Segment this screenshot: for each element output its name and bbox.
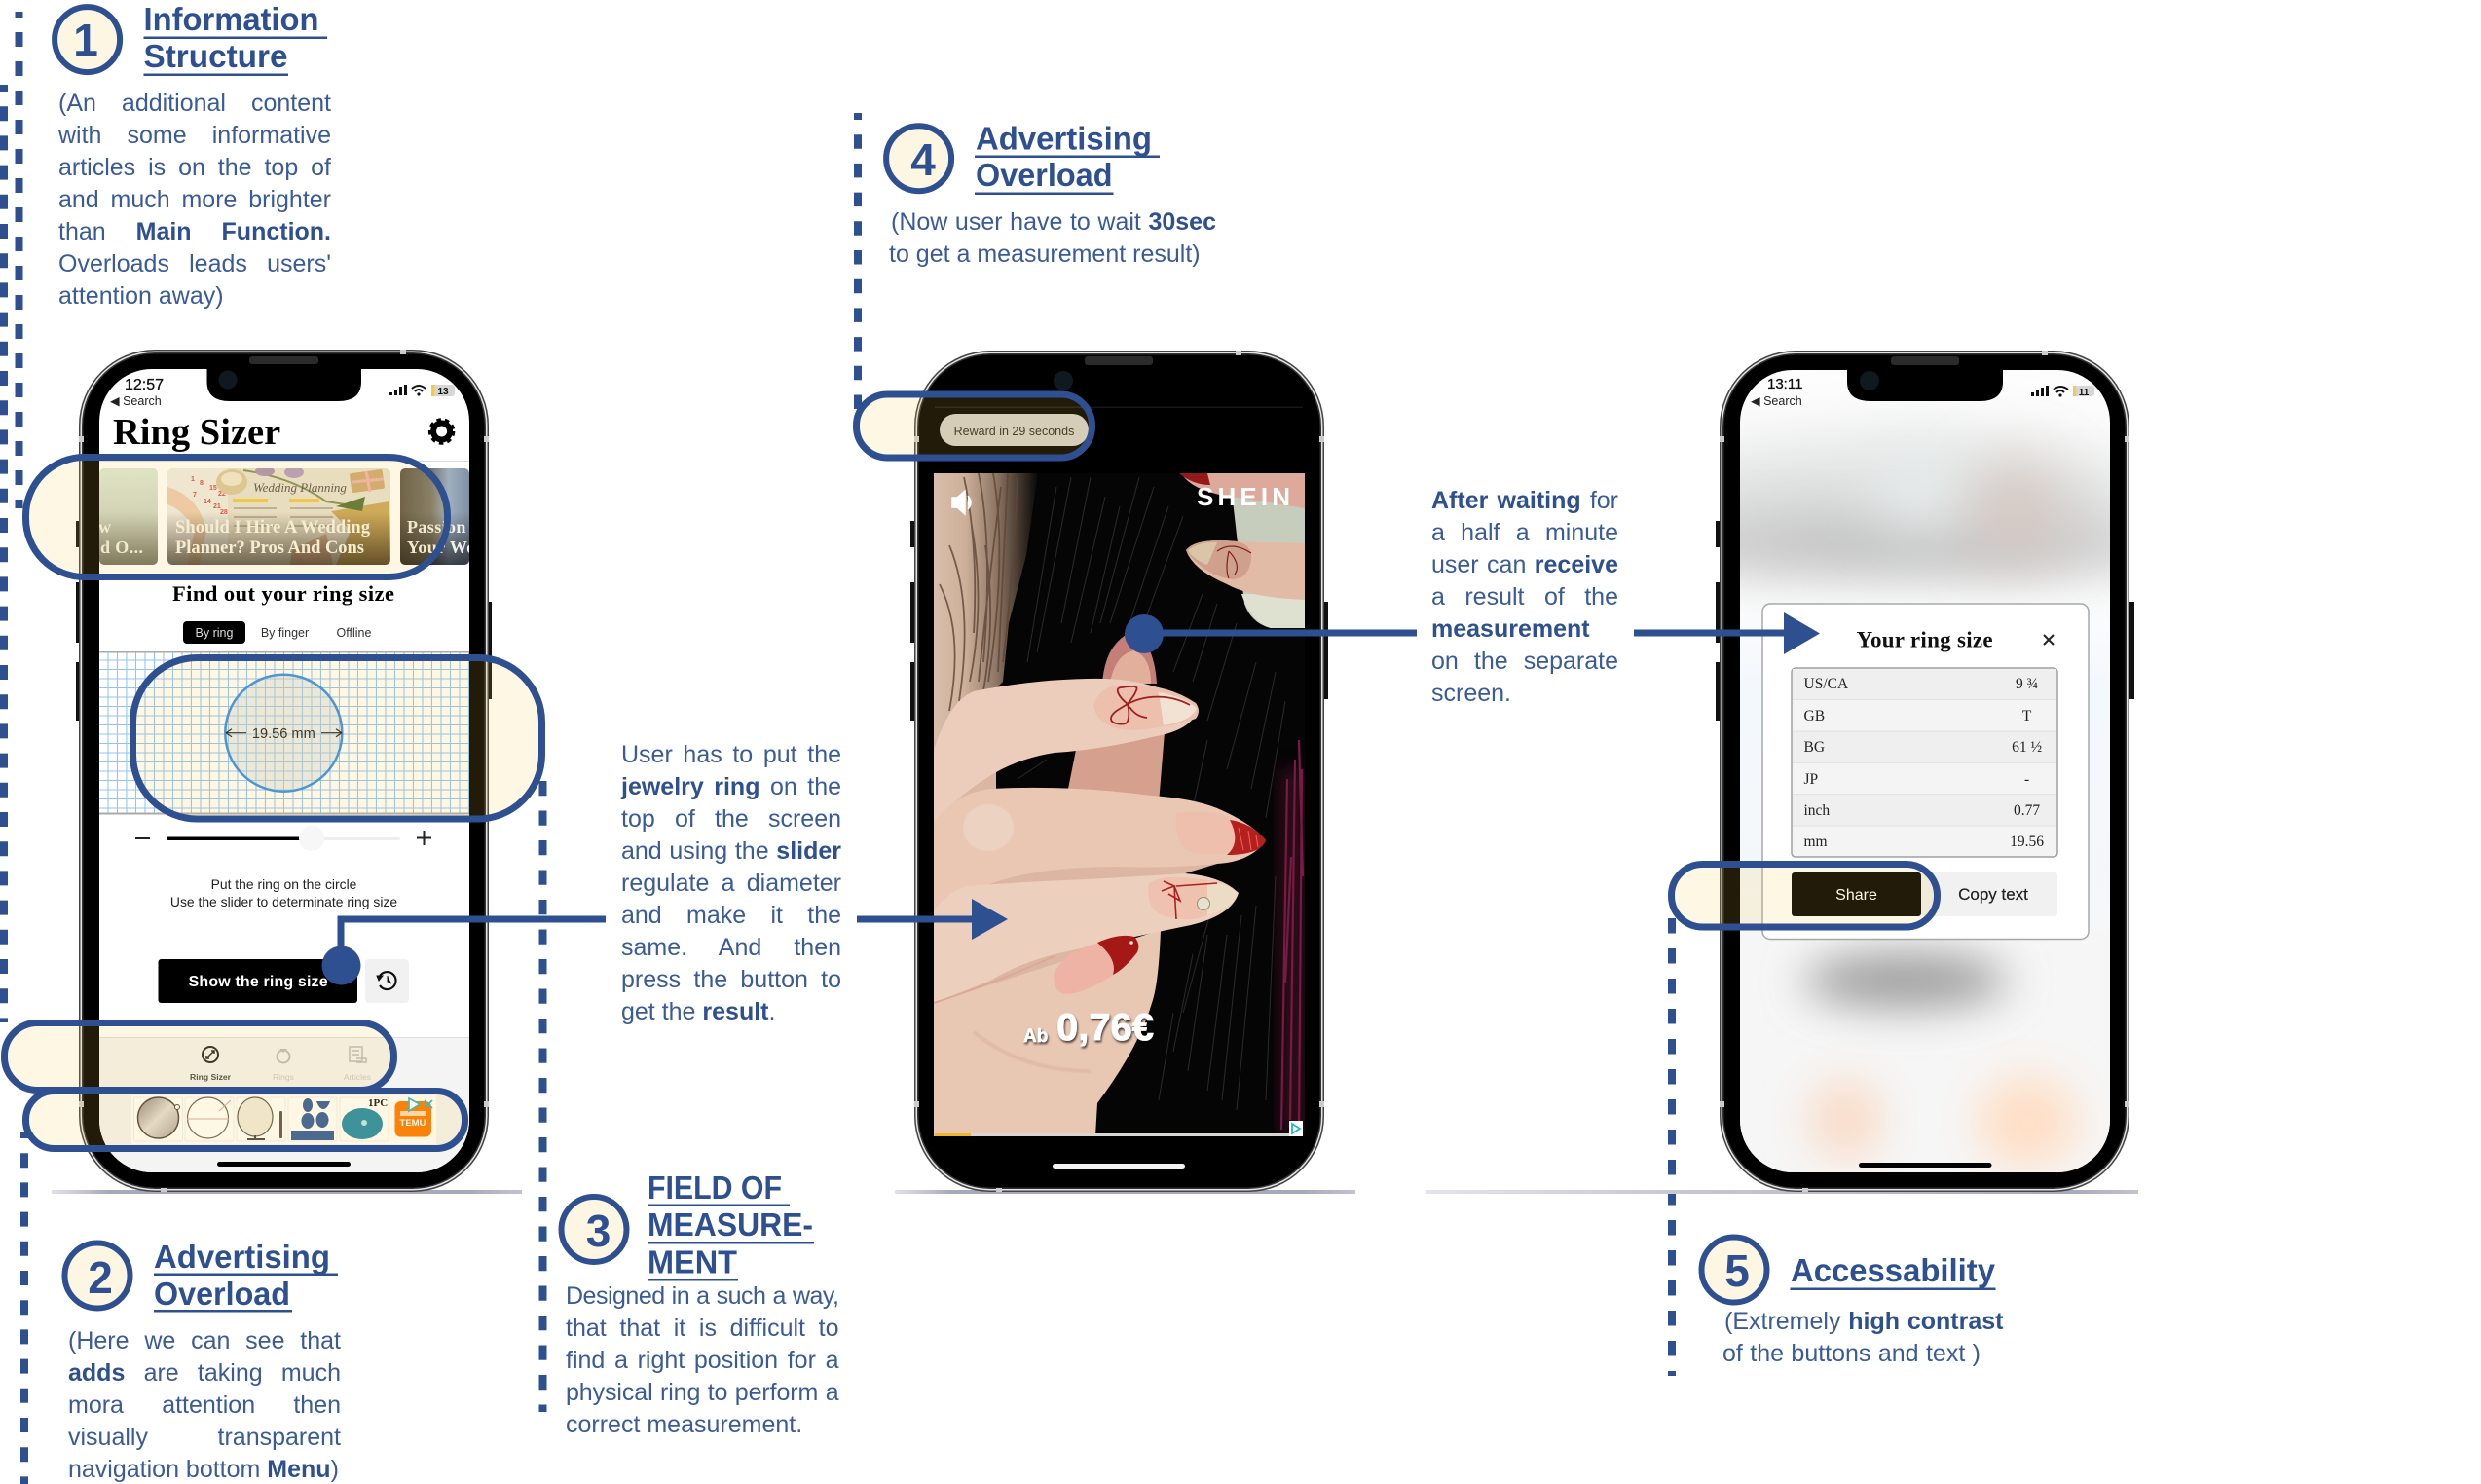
- heading 3: [648, 1169, 814, 1281]
- highlight: measurement field: [132, 658, 541, 819]
- heading 5: Accessability: [1791, 1252, 1996, 1288]
- text block 2: advertising overload: [68, 1327, 341, 1483]
- measurement grid field: [99, 651, 469, 814]
- heading 3: MEASURE-: [648, 1206, 813, 1243]
- video progress bar: [935, 1133, 1291, 1136]
- size table: 9 ¾: [2016, 676, 2038, 692]
- text block: slider instructions: get the result.: [621, 998, 775, 1025]
- tabs: Offline: [337, 626, 371, 640]
- phone 2: interstitial video ad: [910, 351, 1328, 1192]
- heading 2: [154, 1239, 338, 1313]
- tabs: [183, 621, 371, 644]
- text block 2: advertising overload: mora attention then: [68, 1391, 341, 1419]
- card: wedding planner: 28: [220, 509, 228, 516]
- phone 1 screen content: [90, 369, 484, 1172]
- video ad picture: hand with red nails: [934, 473, 1305, 1136]
- badge 5: [1702, 1237, 1766, 1303]
- card: wedding planner: Should I Hire A Wedding: [175, 518, 371, 538]
- button: share: Share: [1835, 887, 1877, 904]
- instruction text: [170, 876, 397, 909]
- badge 4: [886, 126, 951, 191]
- arrow: description to ad screen: [857, 899, 1008, 940]
- phone 3: result screen: [1716, 351, 2134, 1192]
- button: share: [1792, 872, 1921, 916]
- text block 1: information structure: [58, 90, 331, 310]
- badge 3: 3: [586, 1206, 611, 1256]
- size table: BG: [1803, 739, 1825, 756]
- text block 2: advertising overload: visually transparent: [68, 1424, 341, 1451]
- text block 1: information structure: (An additional content: [58, 90, 331, 117]
- text block: slider instructions: regulate a diameter: [621, 870, 841, 897]
- connector: button to description: [321, 919, 606, 985]
- text block 1: information structure: than Main Function.: [58, 218, 331, 245]
- button: copy text: Copy text: [1958, 885, 2028, 904]
- text block 4: wait for result: to get a measurement result): [889, 240, 1201, 267]
- text block: slider instructions: press the button to: [621, 966, 841, 993]
- text block 3: field of measurement: that that it is difficult to: [566, 1315, 839, 1342]
- icon: ad choices: [1289, 1121, 1303, 1136]
- button: show the ring size: Show the ring size: [189, 974, 328, 990]
- price label: 0,76€: [1056, 1007, 1154, 1049]
- card: wedding planner: [167, 466, 390, 565]
- phone 1: ring sizer screen: [76, 350, 492, 1192]
- bottom navigation: Articles: [344, 1072, 371, 1082]
- card: left: [99, 468, 158, 565]
- badge 5: 5: [1724, 1245, 1750, 1296]
- text block 4: wait for result: (Now user have to wait 30sec: [891, 208, 1216, 236]
- card: wedding planner: 15: [209, 485, 217, 492]
- size table: JP: [1803, 771, 1818, 788]
- heading 4: Advertising: [976, 121, 1152, 157]
- card: right: Your Wea: [407, 538, 484, 557]
- article cards carousel: [90, 466, 484, 565]
- highlight: reward countdown: [857, 394, 1092, 458]
- heading 4: [975, 121, 1160, 195]
- text block: slider instructions: User has to put the: [621, 741, 841, 768]
- heading 1: Information: [144, 1, 319, 37]
- size table: US/CA: [1803, 676, 1849, 692]
- icon: history button: [365, 959, 409, 1003]
- heading 1: [144, 1, 327, 76]
- nail with red tip: [1227, 820, 1266, 855]
- text block: slider instructions: top of the screen: [621, 805, 841, 833]
- nail with red half: [1054, 936, 1138, 994]
- blurred background: [1740, 370, 2110, 1172]
- text block 5: accessibility: of the buttons and text ): [1722, 1340, 1981, 1367]
- size table: -: [2024, 771, 2029, 788]
- heading 3: FIELD OF: [648, 1169, 782, 1206]
- banner ad strip: TEMU: [400, 1118, 426, 1129]
- status bar: [1751, 378, 2094, 407]
- text block 1: information structure: Overloads leads users': [58, 250, 331, 278]
- badge 1: 1: [73, 15, 98, 65]
- reward countdown pill: [940, 414, 1089, 446]
- text block 3: field of measurement: Designed in a such a way,: [566, 1282, 839, 1310]
- status bar: 12:57: [125, 377, 164, 393]
- text block: slider instructions: same. And then: [621, 934, 841, 961]
- text block: after waiting: a result of the: [1431, 583, 1618, 611]
- price label: Ab: [1023, 1026, 1048, 1047]
- text block 2: advertising overload: (Here we can see that: [68, 1327, 341, 1354]
- status bar: 13:11: [1767, 376, 1802, 392]
- text block 1: information structure: and much more brighter: [58, 186, 331, 213]
- banner ad strip: 1PC: [368, 1097, 388, 1109]
- bottom navigation: Ring Sizer: [190, 1072, 232, 1082]
- text block: after waiting: user can receive: [1431, 551, 1618, 578]
- text block 3: field of measurement: physical ring to perform a: [566, 1379, 839, 1406]
- instruction text: Use the slider to determinate ring size: [170, 894, 397, 909]
- text block 4: wait for result: [889, 208, 1216, 267]
- text block 2: advertising overload: navigation bottom Menu): [68, 1456, 339, 1483]
- size table: 0.77: [2014, 802, 2040, 819]
- ad thumbnails: [134, 1097, 389, 1141]
- size table: [1792, 668, 2057, 857]
- badge 3: [561, 1197, 627, 1262]
- badge 2: 2: [88, 1252, 113, 1303]
- card: wedding planner: 22: [218, 491, 226, 498]
- text block: after waiting: on the separate: [1431, 648, 1618, 675]
- heading: find out your ring size: Find out your ring size: [172, 581, 394, 606]
- top right glass and finger: [1179, 473, 1305, 628]
- phone 1 frame: [76, 350, 492, 1192]
- nail with bow: [1093, 685, 1199, 730]
- text block 5: accessibility: (Extremely high contrast: [1724, 1308, 2004, 1335]
- connector: ad screen to description: [1125, 614, 1417, 653]
- dashed divider lines: [4, 12, 1672, 1484]
- card: wedding planner: 21: [213, 503, 221, 510]
- icon: settings gear: [430, 420, 454, 443]
- card: right: [400, 468, 469, 565]
- phone 2 frame: [910, 351, 1328, 1192]
- price label: [1023, 1013, 1154, 1050]
- text block: slider instructions: and make it the: [621, 902, 841, 929]
- bottom navigation: Rings: [273, 1072, 294, 1082]
- measurement grid field: 19.56 mm: [252, 726, 315, 742]
- tabs: By ring: [196, 626, 233, 640]
- card: left: ow: [90, 517, 111, 537]
- badge 4: 4: [910, 134, 936, 185]
- text block 3: field of measurement: correct measurement.: [566, 1411, 802, 1438]
- status bar: 11: [2079, 388, 2090, 398]
- heading 1: Structure: [144, 38, 288, 74]
- phone 3 frame: [1716, 351, 2134, 1192]
- home indicator: [1053, 1164, 1185, 1169]
- brand logo: SHEIN: [1197, 482, 1290, 511]
- text block: after waiting: screen.: [1431, 680, 1511, 707]
- card: wedding planner: 1: [191, 476, 195, 483]
- banner ad strip: [131, 1095, 436, 1144]
- tabs: By finger: [261, 626, 309, 640]
- card: wedding planner: 7: [193, 492, 197, 499]
- highlight: banner ads: [25, 1091, 465, 1149]
- size table: GB: [1803, 708, 1825, 724]
- text block: after waiting: measurement: [1431, 615, 1590, 643]
- text block: slider instructions: jewelry ring on the: [621, 773, 841, 800]
- hair strands: [1018, 477, 1285, 1110]
- card: wedding planner: 14: [204, 499, 211, 505]
- heading 4: Overload: [976, 157, 1112, 193]
- badge 1: [55, 7, 120, 72]
- instruction text: Put the ring on the circle: [211, 876, 357, 892]
- size table: inch: [1803, 802, 1830, 819]
- button: show the ring size: [158, 959, 357, 1003]
- home indicator: [217, 1162, 351, 1167]
- card: left: d O...: [100, 538, 143, 557]
- button: copy text: [1921, 872, 2057, 916]
- arrow: description to result: [1634, 612, 1820, 654]
- text block: after waiting: a half a minute: [1431, 519, 1618, 546]
- heading 2: Overload: [154, 1276, 290, 1312]
- icon: speaker: [952, 491, 971, 514]
- text block 5: accessibility: [1722, 1308, 2004, 1367]
- result modal: [1762, 604, 2089, 939]
- text block: slider instructions: [621, 741, 841, 1025]
- text block 3: field of measurement: find a right position for a: [566, 1347, 839, 1374]
- size table: 61 ½: [2012, 739, 2042, 756]
- text block 1: information structure: attention away): [58, 282, 224, 310]
- status bar: ◀ Search: [1751, 394, 1802, 408]
- text block 2: advertising overload: adds are taking much: [68, 1359, 341, 1387]
- heading 2: Advertising: [154, 1239, 330, 1275]
- hand silhouette: [934, 633, 1266, 1136]
- status bar: 13: [437, 387, 449, 397]
- icon: close: [2044, 635, 2054, 645]
- card: wedding planner: Planner? Pros And Cons: [175, 538, 364, 558]
- status bar: ◀ Search: [110, 394, 162, 408]
- highlight: navigation menu: [4, 1022, 393, 1091]
- size table: 19.56: [2010, 834, 2044, 850]
- text block: after waiting: After waiting for: [1431, 487, 1618, 514]
- reward countdown pill: Reward in 29 seconds: [954, 425, 1074, 438]
- size table: mm: [1803, 834, 1828, 850]
- floor lines under phones: [52, 1190, 2138, 1194]
- card: wedding planner: Wedding Planning: [253, 480, 347, 495]
- text block: slider instructions: and using the slider: [621, 837, 841, 865]
- text block 1: information structure: with some informative: [58, 122, 331, 149]
- card: wedding planner: 8: [200, 480, 204, 487]
- text block: after waiting: [1431, 487, 1618, 707]
- status bar: [110, 377, 455, 408]
- bottom navigation: [99, 1037, 469, 1172]
- badge 2: [64, 1243, 130, 1309]
- heading 3: MENT: [648, 1244, 737, 1280]
- notch: [206, 356, 361, 401]
- notch: [1847, 356, 2003, 401]
- highlight: article carousel: [25, 458, 448, 576]
- card: right: Passion: [407, 517, 466, 537]
- home indicator: [1859, 1163, 1992, 1168]
- slider: [135, 831, 431, 845]
- size table: T: [2022, 708, 2032, 724]
- highlight: share button: [1671, 865, 1938, 927]
- modal title: Your ring size: [1857, 627, 1993, 652]
- text block 1: information structure: articles is on the top of: [58, 154, 331, 181]
- app title: Ring Sizer: [113, 412, 280, 453]
- text block 3: field of measurement: [566, 1282, 839, 1438]
- nail with ribbon and gem: [1148, 877, 1238, 919]
